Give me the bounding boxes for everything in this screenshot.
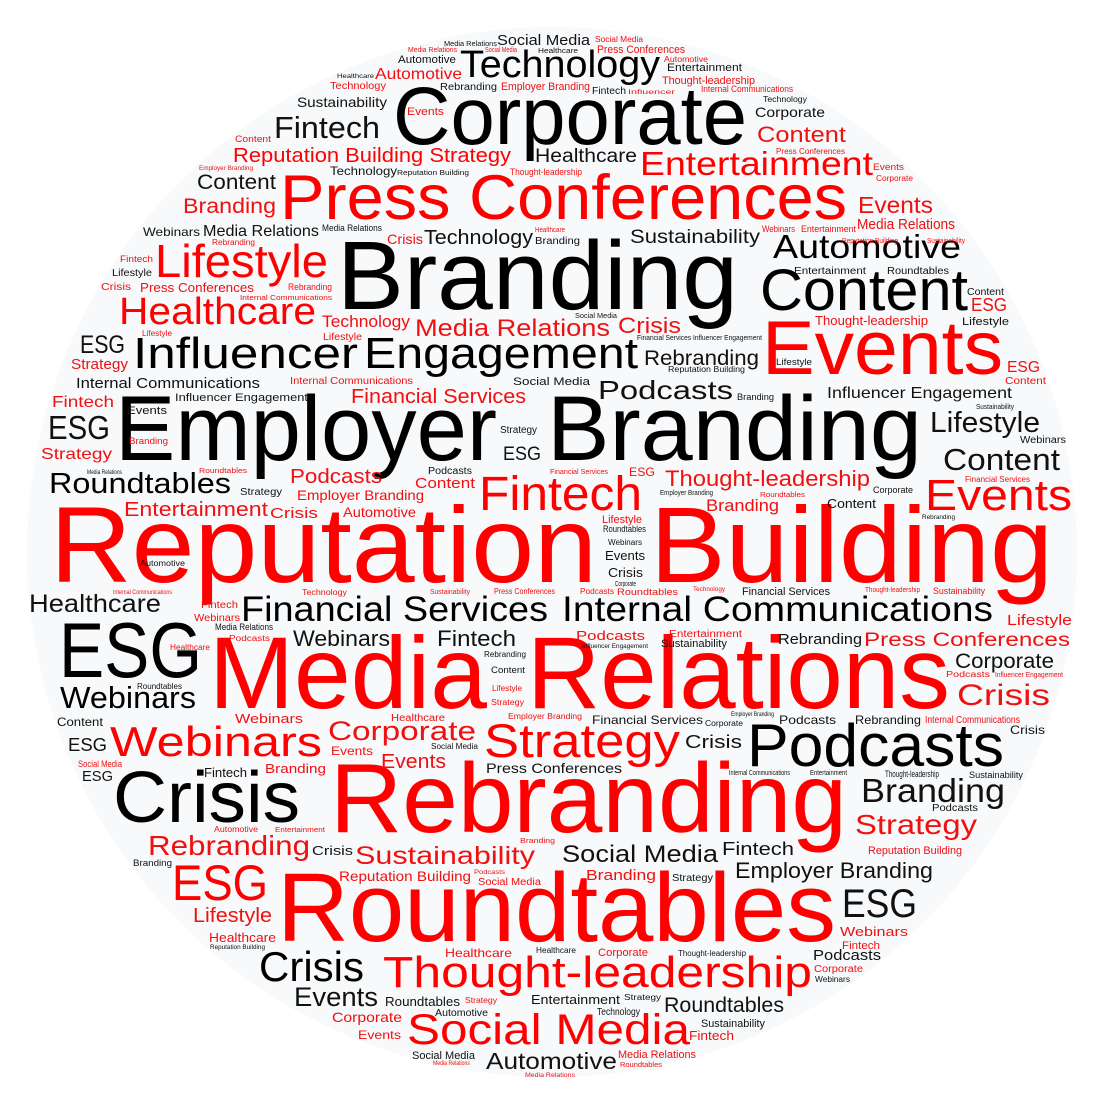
medium and small red words: Webinars [235, 711, 304, 726]
medium and small black words: Rebranding [855, 713, 921, 727]
medium and small black words: Events [127, 405, 168, 417]
medium and small black words: Social Media [575, 313, 617, 320]
medium and small black words: Fintech [592, 86, 626, 97]
medium and small black words: Corporate [955, 650, 1054, 673]
word: Social Media: Social Media [407, 1006, 690, 1054]
word: Events right: Events [925, 471, 1072, 520]
medium and small red words: Financial Services [351, 386, 526, 408]
medium and small red words: Strategy [71, 356, 128, 373]
medium and small red words: Reputation Building [339, 868, 471, 884]
medium and small red words: Employer Branding [297, 487, 424, 503]
medium and small red words: Technology [693, 587, 725, 593]
medium and small red words: Branding [183, 195, 276, 218]
word: Reputation Building: Reputation [50, 484, 597, 605]
medium and small black words: Sustainability [661, 638, 727, 650]
medium and small black words: Employer Branding [731, 712, 774, 718]
medium and small black words: Content [943, 442, 1060, 477]
medium and small black words: Rebranding [922, 515, 955, 521]
medium and small red words: Sustainability [430, 589, 470, 596]
medium and small red words: Thought-leadership [665, 466, 870, 491]
medium and small black words: Content [967, 287, 1004, 298]
word: Media Relations: Relations [527, 616, 950, 730]
medium and small red words: Webinars [762, 224, 795, 234]
medium and small red words: Crisis [387, 231, 423, 247]
word: Employer Branding: Employer [115, 378, 497, 480]
medium and small black words: Financial Services Influencer Engagement [637, 335, 762, 342]
medium and small red words: Internal Communications [701, 84, 793, 94]
medium and small black words: Sustainability [297, 94, 387, 110]
medium and small red words: Social Media [478, 877, 541, 888]
medium and small red words: Crisis [270, 505, 318, 522]
word: Influencer Engagement: Influencer [133, 329, 358, 378]
medium and small black words: Automotive [140, 559, 186, 568]
medium and small red words: Content [1005, 376, 1046, 387]
medium and small red words: Corporate [332, 1009, 402, 1025]
medium and small black words: Content [491, 665, 526, 675]
medium and small black words: Automotive [398, 54, 456, 66]
medium and small black words: Podcasts [598, 375, 733, 405]
medium and small red words: Employer Branding [199, 166, 253, 172]
medium and small black words: Corporate [873, 485, 913, 495]
word: Press Conferences: Press Conferences [280, 163, 847, 233]
medium and small red words: Entertainment [669, 629, 742, 640]
medium and small black words: Media Relations [203, 223, 319, 240]
medium and small red words: Automotive [214, 825, 259, 834]
large black words [49, 44, 1004, 990]
medium and small red words: Reputation Building [842, 238, 898, 245]
medium and small black words: Fintech [437, 626, 516, 651]
word: Lifestyle: Lifestyle [155, 235, 328, 287]
medium and small red words: Social Media [485, 47, 517, 54]
medium and small black words: Podcasts [428, 466, 472, 477]
medium and small red words: Press Conferences [597, 44, 685, 56]
medium and small black words: Webinars [1020, 435, 1066, 446]
word: Technology: Technology [460, 44, 660, 86]
word: Webinars black: Webinars [60, 680, 196, 715]
medium and small black words: Financial Services [742, 586, 830, 598]
medium and small black words: Internal Communications [76, 375, 260, 392]
medium and small red words: Entertainment [801, 224, 856, 234]
medium and small black words: Content [827, 496, 876, 511]
medium and small black words: Social Media [497, 32, 591, 49]
medium and small black words: Podcasts [779, 713, 836, 727]
medium and small black words: Social Media [513, 376, 591, 388]
medium and small black words: Webinars [293, 626, 390, 651]
medium and small red words: Events [873, 162, 905, 172]
medium and small black words: Reputation Building [397, 170, 469, 177]
medium and small black words: Lifestyle [962, 316, 1009, 328]
medium and small black words: Sustainability [630, 227, 761, 248]
medium and small red words: Podcasts [229, 634, 270, 643]
medium and small red words: Thought-leadership [815, 313, 928, 328]
word: Reputation Building: Building [650, 484, 1053, 605]
medium and small red words: Lifestyle [193, 905, 272, 927]
medium and small black words: Content [197, 171, 276, 194]
medium and small red words: Media Relations [525, 1073, 575, 1079]
medium and small black words: Rebranding [440, 82, 497, 93]
medium and small black words: Branding [737, 392, 774, 402]
medium and small black words: Reputation Building [210, 945, 265, 951]
medium and small red words: Podcasts [580, 587, 614, 596]
word: ESG left: ESG [59, 606, 202, 694]
word: Webinars: Webinars [110, 718, 322, 765]
medium and small black words: Crisis [312, 843, 354, 858]
medium and small black words: Roundtables [137, 682, 182, 691]
medium and small red words: Crisis [618, 313, 681, 338]
medium and small red words: Webinars [840, 924, 909, 939]
medium and small black words: Strategy [500, 425, 537, 436]
medium and small red words: Media Relations [857, 216, 955, 233]
word: Strategy: Strategy [484, 714, 681, 767]
word: Content: Content [760, 258, 968, 323]
medium and small red words: Rebranding [212, 238, 255, 247]
word: Thought-leadership: Thought-leadership [383, 948, 812, 997]
medium and small black words: Corporate [705, 719, 744, 728]
medium and small red words: Reputation Building [868, 845, 962, 857]
medium and small black words: Healthcare [538, 48, 578, 55]
medium and small black words: Media Relations [322, 223, 382, 233]
medium and small black words: Social Media [412, 1050, 476, 1062]
word: Events upper: Events [762, 306, 1003, 391]
medium and small red words: Events [358, 1028, 401, 1042]
medium and small black words: Automotive [435, 1008, 488, 1019]
medium and small black words: Employer Branding [735, 858, 933, 883]
word: Healthcare: Healthcare [119, 291, 316, 333]
large red words [50, 145, 1072, 1054]
medium and small red words: ESG [1007, 359, 1040, 376]
word: Automotive: Automotive [773, 228, 961, 265]
medium and small red words: Branding [520, 838, 555, 845]
medium and small red words: Internal Communications [240, 295, 333, 302]
medium and small black words: Technology [597, 1007, 640, 1018]
word: Influencer Engagement: Engagement [364, 329, 638, 378]
medium and small red words: Branding [265, 761, 326, 776]
medium and small red words: Fintech [52, 394, 114, 411]
word: Fintech: Fintech [479, 468, 642, 521]
medium and small red words: Webinars [194, 613, 240, 624]
medium and small red words: Media Relations [618, 1049, 696, 1061]
medium and small black words: Thought-leadership [885, 769, 939, 779]
medium and small red words: Healthcare [170, 643, 211, 652]
medium and small red words: Media Relations [415, 315, 610, 342]
word: Entertainment: Entertainment [640, 145, 873, 182]
word: Rebranding: Rebranding [330, 743, 847, 853]
medium and small red words: Sustainability [355, 842, 536, 870]
medium and small red words: Corporate [814, 964, 863, 975]
medium and small red words: Lifestyle [602, 514, 642, 526]
medium and small red words: Sustainability [933, 586, 985, 596]
word: Roundtables: Roundtables [277, 853, 836, 962]
medium and small black words: Fintech [274, 110, 380, 145]
medium and small black words: Employer Branding [660, 490, 713, 497]
medium and small red words: Podcasts [576, 628, 646, 643]
word: Reputation Building [50, 484, 1053, 605]
medium and small black words: Strategy [624, 993, 661, 1002]
medium and small red words: Financial Services [550, 469, 608, 476]
medium and small red words: Fintech [120, 254, 153, 264]
medium and small red words: Internal Communications [113, 590, 172, 596]
medium and small red words: Press Conferences [864, 630, 1070, 651]
medium and small black words: Lifestyle [776, 357, 812, 367]
medium and small red words: Branding [129, 436, 168, 446]
word: Financial Services: Financial Services [241, 590, 548, 629]
medium and small red words: Roundtables [617, 587, 679, 597]
medium and small red words: Roundtables [760, 492, 806, 499]
medium and small black words: Strategy [240, 487, 282, 498]
medium and small black words: Entertainment [667, 62, 742, 74]
medium and small black words: Media Relations [87, 470, 122, 476]
medium and small red words: Content [757, 122, 846, 147]
medium and small black words: Strategy [672, 873, 713, 884]
medium and small black words: ESG [80, 331, 125, 359]
word: Crisis: Crisis [113, 758, 300, 838]
medium and small black words: Events [605, 548, 645, 563]
medium and small red words: Press Conferences [494, 587, 555, 596]
medium and small red words: Entertainment [275, 827, 325, 834]
medium and small black words: Roundtables [887, 266, 949, 277]
word: Corporate: Corporate [393, 71, 747, 162]
medium and small red words: ESG [971, 295, 1007, 315]
medium and small black words: Entertainment [531, 992, 620, 1007]
medium and small black words: Press Conferences [486, 760, 622, 776]
medium and small red words: Technology [302, 588, 347, 597]
word: Roundtables black: Roundtables [49, 468, 231, 500]
word: Influencer Engagement [133, 329, 638, 378]
medium and small red words: Podcasts [290, 466, 382, 488]
medium and small black words: Influencer Engagement [582, 644, 648, 650]
medium and small black words: Entertainment [794, 266, 866, 277]
medium and small red words: Strategy [855, 809, 977, 840]
medium and small black words: Roundtables [385, 994, 461, 1009]
medium and small red words: Corporate [328, 716, 476, 746]
medium and small red words: Events [381, 751, 446, 773]
medium and small red words: Thought-leadership [510, 167, 582, 177]
medium and small red words: Corporate [598, 947, 648, 959]
word: Media Relations [209, 616, 950, 730]
medium and small black words: Branding [133, 858, 172, 868]
medium and small red words: Technology [330, 81, 386, 92]
medium and small red words: Healthcare [391, 713, 445, 724]
medium and small red words: Media Relations [433, 1061, 470, 1067]
medium and small black words: Sustainability [976, 404, 1014, 411]
medium and small black words: Lifestyle [930, 407, 1040, 439]
medium and small black words: Podcasts [932, 803, 978, 814]
medium and small black words: Webinars [608, 538, 642, 547]
medium and small black words: ESG [503, 444, 541, 465]
medium and small black words: Content [57, 715, 104, 729]
medium and small red words: Lifestyle [1007, 612, 1072, 629]
medium and small red words: Healthcare [535, 227, 565, 234]
word: Branding: Branding [337, 221, 738, 330]
medium and small red words: Events [858, 192, 933, 218]
medium and small black words: Media Relations [444, 41, 498, 48]
medium and small red words: Events [331, 744, 373, 758]
medium and small black words: Thought-leadership [678, 949, 747, 958]
medium and small red words: Crisis [101, 282, 131, 293]
medium and small black words: Healthcare [29, 590, 161, 618]
medium and small red words: Press Conferences [140, 280, 255, 295]
medium and small red words: Press Conferences [776, 147, 845, 156]
medium and small red words: Fintech [842, 940, 880, 952]
medium and small black words: Influencer Engagement [175, 392, 308, 404]
medium and small black words: Lifestyle [112, 268, 152, 279]
word: Employer Branding [115, 378, 922, 480]
medium and small red words: Internal Communications [290, 376, 413, 387]
medium and small black words: Branding [861, 772, 1005, 809]
medium and small red words: Content [235, 134, 272, 144]
medium and small black words: Technology [763, 95, 807, 104]
medium and small red words: Automotive [343, 504, 416, 520]
word: Reputation Building Strategy: Reputation Building Strategy [233, 145, 511, 167]
medium and small red words: Thought-leadership [662, 75, 755, 87]
word: Employer Branding: Branding [547, 378, 922, 480]
word: ESG lower: ESG [172, 855, 268, 911]
medium and small black words: Fintech [204, 765, 247, 780]
medium and small red words: Internal Communications [925, 715, 1020, 726]
medium and small red words: Healthcare [209, 930, 276, 945]
word: Crisis lower: Crisis [259, 943, 364, 990]
medium and small black words: Podcasts [813, 947, 881, 964]
medium and small red words: Entertainment [124, 499, 269, 521]
medium and small black words: Reputation Building [668, 365, 745, 374]
medium and small black words: Healthcare [536, 946, 577, 955]
medium and small red words: Corporate [876, 174, 914, 183]
medium and small red words: Employer Branding [501, 81, 590, 93]
medium and small black words: Entertainment [810, 770, 847, 777]
word: Podcasts: Podcasts [747, 712, 1004, 779]
medium and small black words: Roundtables [603, 524, 646, 534]
medium and small black words: Events [294, 982, 378, 1012]
medium and small red words: Branding [706, 496, 779, 515]
medium and small black words: Media Relations [215, 622, 273, 632]
medium and small black words: Rebranding [778, 631, 862, 648]
medium and small black words: Social Media [431, 742, 479, 751]
medium and small red words: Technology [322, 312, 411, 331]
medium and small red words: Thought-leadership [865, 587, 920, 594]
medium and small red words: Podcasts [474, 870, 505, 876]
medium and small black words: ESG [842, 882, 917, 926]
medium and small black words: Corporate [615, 581, 636, 588]
medium and small black words: Webinars [815, 975, 850, 984]
medium and small black words: Automotive [486, 1048, 617, 1074]
medium and small black words: Social Media [562, 841, 719, 868]
medium and small red words: Lifestyle [323, 332, 362, 343]
medium and small black words: Branding [535, 236, 580, 247]
medium and small red words: Media Relations [408, 47, 457, 54]
medium and small red words: Rebranding [288, 282, 332, 292]
medium and small black words: Rebranding [484, 650, 526, 659]
medium and small black words: Influencer Engagement [827, 385, 1013, 402]
medium and small black words: Internal Communications [729, 770, 790, 777]
medium and small red words: Automotive [375, 66, 462, 83]
medium and small red words: Branding [586, 867, 656, 884]
medium and small red words: Healthcare [445, 946, 512, 960]
medium and small black words: ESG [48, 409, 110, 446]
medium and small red words: Fintech [689, 1028, 734, 1043]
word: Media Relations: Media [209, 616, 487, 730]
medium and small red words: Strategy [491, 698, 524, 707]
medium and small black words: Healthcare [535, 146, 637, 167]
medium and small red words: Lifestyle [492, 684, 523, 693]
medium and small black words: ESG [82, 768, 113, 785]
medium and small red words: Roundtables [620, 1062, 663, 1069]
medium and small black words: Financial Services [592, 713, 703, 727]
medium and small red words: Automotive [664, 55, 709, 64]
medium and small black words: Sustainability [701, 1018, 765, 1030]
medium and small red words: Fintech [201, 600, 238, 611]
medium and small black words: Webinars [143, 225, 200, 239]
medium and small black words: Roundtables [664, 994, 784, 1017]
word: Internal Communications: Internal Communications [562, 590, 993, 629]
medium and small black words: Corporate [755, 104, 825, 120]
medium and small black words: Technology [424, 227, 533, 249]
medium and small red words: Podcasts [946, 670, 990, 679]
medium and small red words: Content [415, 475, 476, 492]
medium and small red words: Rebranding [148, 830, 310, 861]
medium and small red words: Social Media [78, 759, 122, 769]
medium and small black words: Fintech [722, 839, 794, 859]
medium and small red words: Influencer Engagement [995, 672, 1063, 679]
medium and small black words: Technology [330, 164, 397, 178]
medium and small red words: Lifestyle [142, 329, 173, 338]
medium and small black words: Crisis [1010, 723, 1045, 737]
medium and small red words: ESG [629, 465, 655, 479]
medium and small red words: Sustainability [927, 238, 965, 245]
medium and small red words: Strategy [465, 996, 497, 1005]
medium and small red words: Employer Branding [508, 712, 582, 721]
medium and small red words: Roundtables [199, 468, 248, 475]
medium and small black words: Crisis [608, 565, 644, 580]
medium and small black words: Sustainability [969, 770, 1024, 780]
medium and small black words: Crisis [685, 732, 742, 752]
medium and small black words: Rebranding [644, 347, 759, 370]
medium and small red words: Strategy [41, 446, 112, 463]
medium and small red words: Financial Services [965, 475, 1030, 484]
medium and small black words: Healthcare [337, 74, 375, 80]
medium and small black words: ESG [68, 735, 107, 755]
medium and small red words: Social Media [595, 35, 644, 44]
medium and small red words: Influencer [628, 90, 675, 96]
medium and small red words: Crisis [957, 679, 1050, 712]
medium and small red words: Events [407, 106, 445, 118]
